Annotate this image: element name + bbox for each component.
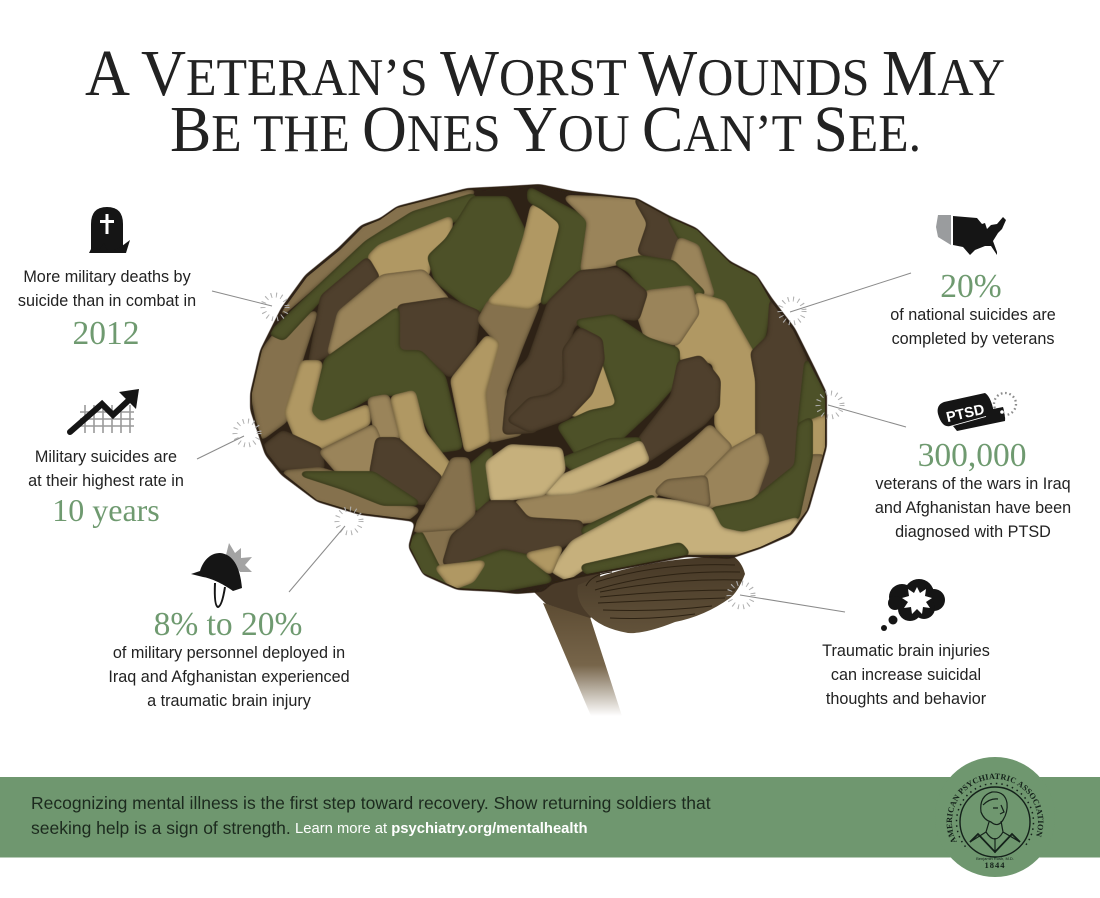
icon: US map (936, 215, 1006, 255)
icon: helmet with burst (191, 543, 252, 607)
cerebellum (577, 556, 745, 633)
text: suicide vs combat (18, 268, 196, 310)
icon: rising chart arrow (70, 389, 139, 433)
text: brain injury thoughts: Traumatic brain injuries (822, 642, 990, 660)
text: brain injury thoughts: can increase suicidal (831, 666, 981, 684)
number: 10 years: 10 years (52, 492, 160, 528)
text: suicide vs combat: suicide than in combat in (18, 292, 196, 310)
pointer: PTSD (818, 393, 906, 427)
text: highest rate: at their highest rate in (28, 472, 184, 490)
text: highest rate (28, 448, 184, 490)
panel: deaths by suicide (18, 207, 196, 352)
number: 20%: 20% (940, 268, 1002, 305)
footer message: Recognizing mental illness is the first step toward recovery. Show returning soldiers that (31, 793, 711, 813)
pointer: highest rate (197, 421, 259, 459)
icon: tombstone with cross (89, 207, 130, 253)
number: 2012: 2012 (72, 315, 140, 352)
footer band (0, 757, 1100, 877)
top and right-hand folds (567, 198, 650, 270)
text: TBI personnel: of military personnel deployed in (113, 644, 345, 662)
icon: dog tags: PTSD (945, 402, 986, 426)
footer message: Learn more at psychiatry.org/mentalhealth (295, 821, 587, 837)
text: PTSD veterans: veterans of the wars in Iraq (875, 475, 1071, 493)
lower-left frontal folds (265, 433, 322, 468)
cerebrum silhouette (250, 184, 827, 594)
pointer: brain injury rate (289, 509, 361, 592)
number: 300,000: 300,000 (918, 437, 1026, 474)
callout pointers (197, 273, 911, 612)
brain stem junction (530, 572, 602, 618)
number: 8% to 20%: 8% to 20% (154, 606, 302, 643)
text: suicide vs combat: More military deaths by (23, 268, 192, 286)
panel: traumatic brain injury rate (108, 543, 350, 710)
text: TBI personnel: a traumatic brain injury (147, 692, 312, 710)
brain stem (543, 603, 622, 716)
text: brain injury thoughts (822, 642, 990, 708)
pointer: thoughts (729, 583, 845, 612)
text: PTSD veterans (875, 475, 1071, 541)
pointer: suicide deaths (212, 291, 287, 319)
text: PTSD veterans: and Afghanistan have been (875, 499, 1071, 517)
panel: highest rate (28, 389, 184, 528)
portrait (970, 792, 1020, 853)
camouflage gyri (253, 190, 825, 590)
panel: thoughts and behavior (822, 579, 990, 708)
pointer: national suicides (780, 273, 911, 323)
panel: national suicides (890, 215, 1056, 348)
panel: PTSD (875, 393, 1071, 541)
text: national suicides (890, 306, 1056, 348)
title: BE THE ONES YOU CAN’T SEE. (170, 93, 921, 166)
text: TBI personnel: Iraq and Afghanistan experienced (108, 668, 350, 686)
text: brain injury thoughts: thoughts and behavior (826, 690, 987, 708)
seal: American Psychiatric Association: 1844 (984, 860, 1006, 870)
central curling folds (505, 270, 645, 432)
title (85, 37, 1005, 166)
upper-left frontal folds (253, 313, 315, 437)
lower temporal folds (517, 427, 730, 523)
text: PTSD veterans: diagnosed with PTSD (895, 523, 1051, 541)
icon: thought bubble with burst (881, 579, 945, 631)
text: TBI personnel (108, 644, 350, 710)
text: national suicides: completed by veterans (892, 330, 1054, 348)
text: national suicides: of national suicides are (890, 306, 1056, 324)
seal: American Psychiatric Association: AMERICAN PSYCHIATRIC ASSOCIATION (946, 774, 1044, 842)
footer message (31, 793, 711, 838)
title: A VETERAN’S WORST WOUNDS MAY (85, 37, 1005, 110)
footer message: seeking help is a sign of strength. (31, 818, 291, 838)
text: highest rate: Military suicides are (35, 448, 177, 466)
seal: American Psychiatric Association: Benjamin Rush, M.D. (976, 856, 1014, 861)
icon: dog tags (938, 393, 1016, 431)
seal: American Psychiatric Association (946, 757, 1044, 877)
brain illustration (250, 184, 827, 716)
